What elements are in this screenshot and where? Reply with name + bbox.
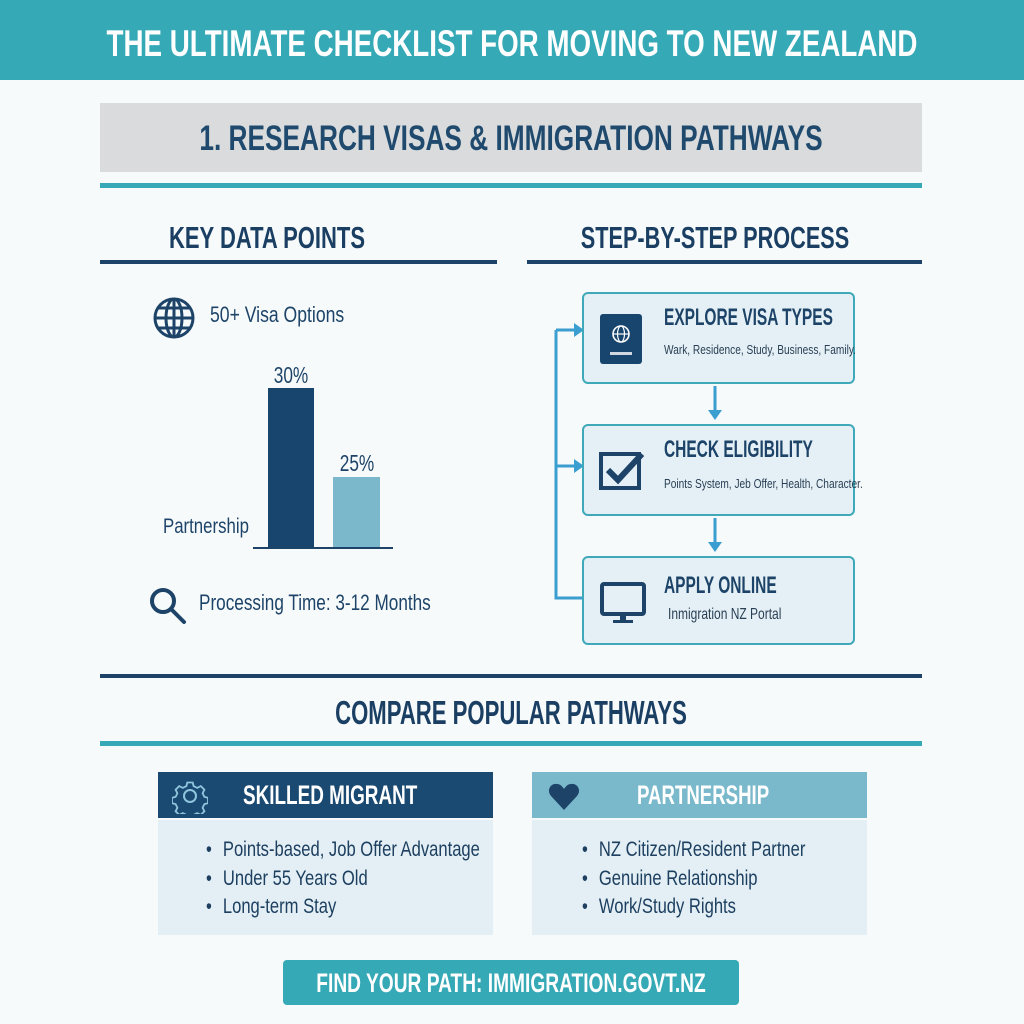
footer button: FIND YOUR PATH: IMMIGRATION.GOVT.NZ — [316, 968, 706, 998]
icon: checkbox — [599, 452, 644, 490]
bar chart: 30% — [274, 362, 308, 388]
stat: visa options: 50+ Visa Options — [210, 302, 344, 327]
card: skilled migrant: Under 55 Years Old — [223, 866, 368, 890]
bar chart — [163, 362, 393, 549]
card: skilled migrant: Points-based, Job Offer Advantage — [223, 838, 480, 861]
stat: processing time: Processing Time: 3-12 Months — [199, 590, 431, 615]
step 1: explore visa types — [582, 292, 855, 384]
icon: monitor — [600, 582, 646, 623]
title bar — [0, 0, 1024, 80]
icon: globe — [154, 298, 194, 338]
section banner — [100, 103, 922, 172]
heading: key data points: KEY DATA POINTS — [169, 220, 365, 255]
footer button — [283, 960, 739, 1005]
card: partnership: PARTNERSHIP — [637, 780, 769, 810]
card: partnership: NZ Citizen/Resident Partner — [599, 838, 805, 861]
step 2: check eligibility: CHECK ELIGIBILITY — [664, 436, 813, 463]
step 2: check eligibility — [582, 424, 855, 516]
icon: magnifier — [150, 588, 186, 624]
step 1: explore visa types: EXPLORE VISA TYPES — [664, 304, 833, 331]
heading: compare pathways: COMPARE POPULAR PATHWAYS — [335, 694, 687, 731]
section banner: 1. RESEARCH VISAS & IMMIGRATION PATHWAYS — [199, 119, 823, 158]
card: partnership: Genuine Relationship — [599, 866, 758, 890]
card: partnership: Work/Study Rights — [599, 895, 736, 918]
step 3: apply online: APPLY ONLINE — [664, 572, 777, 599]
step 3: apply online: Inmigration NZ Portal — [668, 606, 781, 623]
card: partnership — [532, 772, 867, 935]
card: skilled migrant: Long-term Stay — [223, 895, 336, 918]
card: skilled migrant: SKILLED MIGRANT — [243, 780, 417, 810]
icon: gear — [172, 782, 208, 814]
connector arrows — [554, 323, 722, 600]
bar chart: 25% — [340, 450, 374, 476]
bar chart: Partnership — [163, 515, 249, 538]
step 2: check eligibility: Points System, Jeb Offer, Health, Character. — [664, 476, 863, 491]
step 1: explore visa types: Wark, Residence, Study, Business, Family. — [664, 342, 856, 357]
card: skilled migrant — [158, 772, 493, 935]
icon: passport — [600, 314, 642, 364]
step 3: apply online — [582, 556, 855, 645]
title bar: THE ULTIMATE CHECKLIST FOR MOVING TO NEW ZEALAND — [107, 23, 917, 64]
icon: heart — [548, 784, 579, 810]
heading: step-by-step: STEP-BY-STEP PROCESS — [581, 220, 849, 255]
